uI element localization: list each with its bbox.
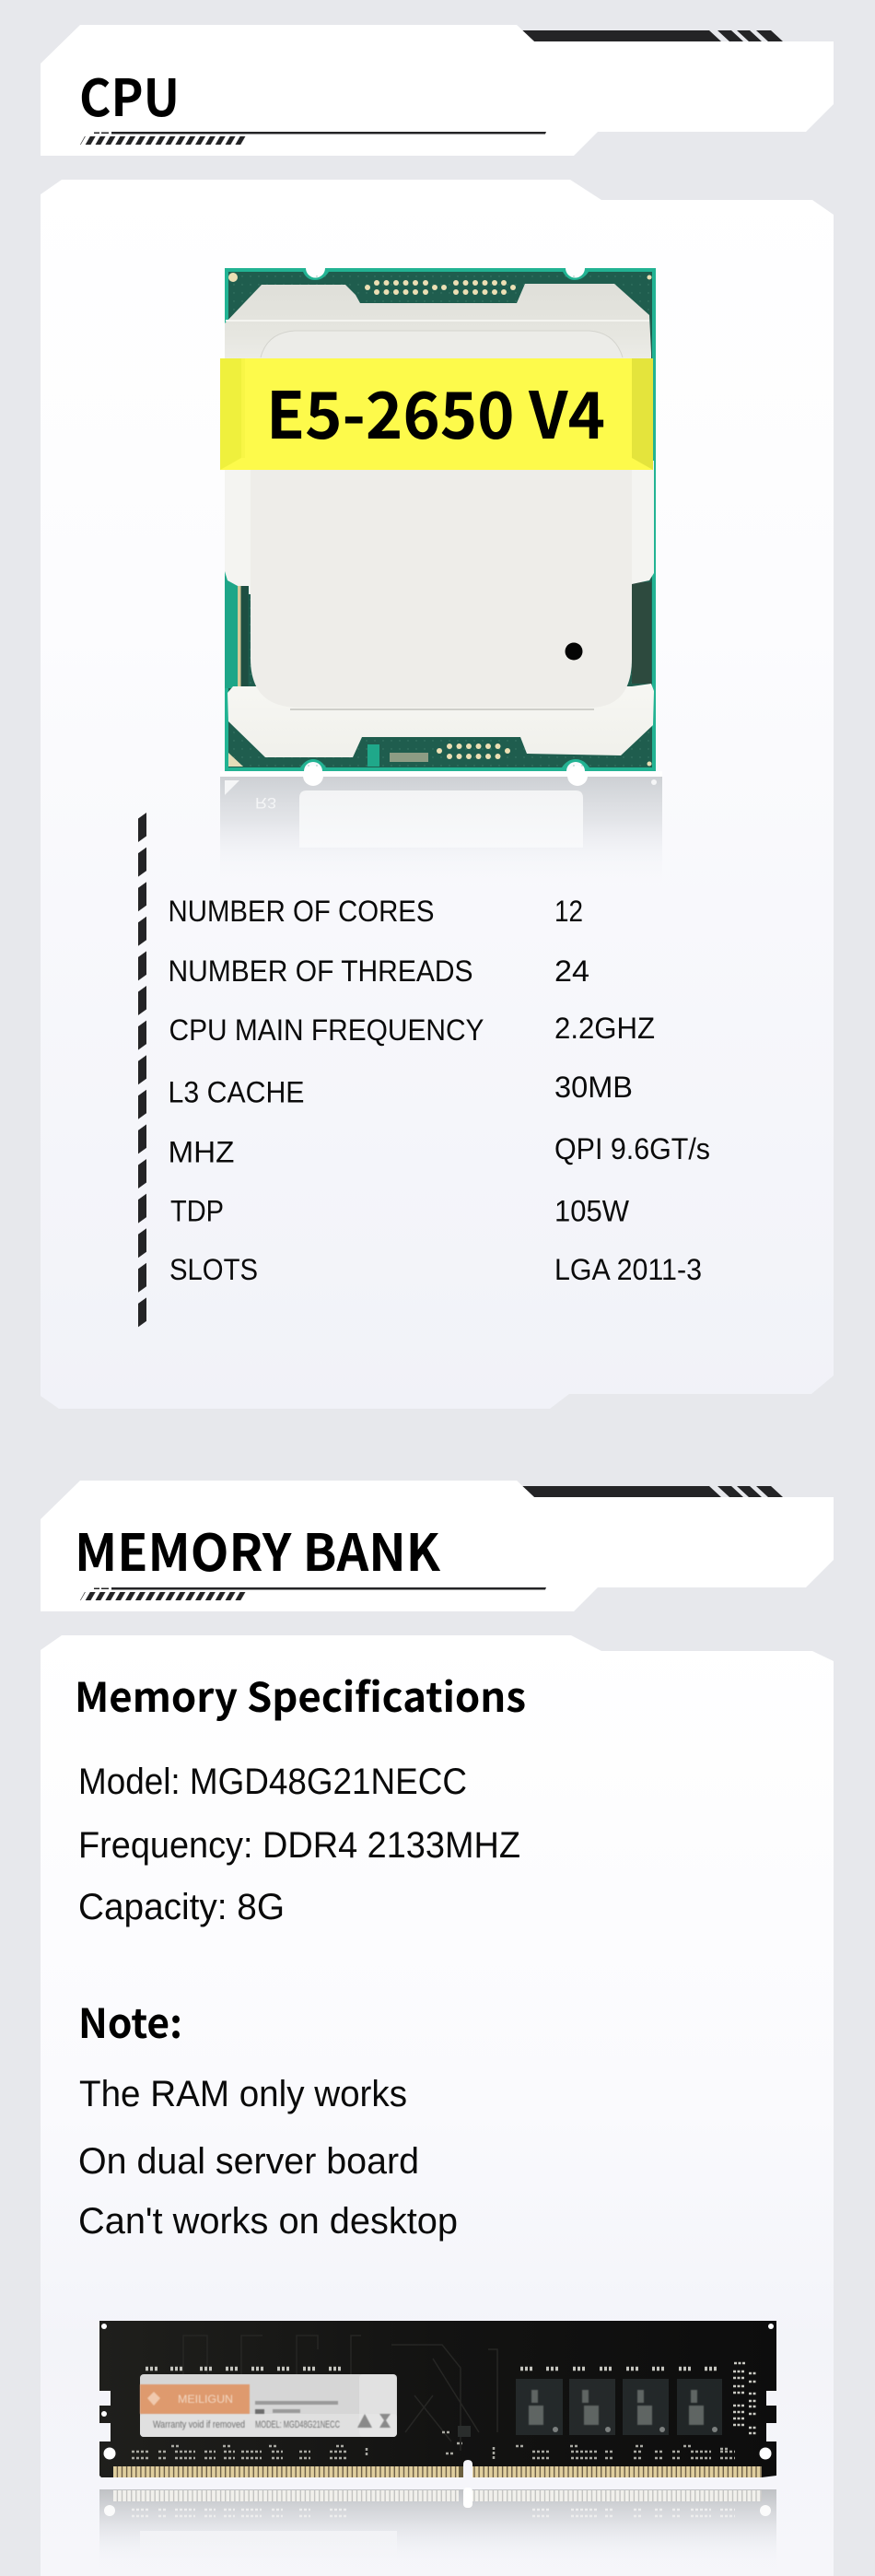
hatched strip xyxy=(80,136,250,145)
product label xyxy=(140,2374,397,2437)
hatched strip xyxy=(80,1592,250,1600)
striped vertical rule xyxy=(138,813,146,1327)
model number: E5-2650 V4 xyxy=(266,365,605,458)
blurred label text xyxy=(153,2401,391,2430)
panel: CPU specifications xyxy=(41,180,834,1409)
panel background xyxy=(41,180,834,1409)
heading: MEMORY BANK: MEMORY BANK xyxy=(75,1512,440,1586)
note lines: The RAM only works xyxy=(79,2074,407,2114)
header plate xyxy=(41,1481,834,1611)
CPU substrate xyxy=(225,268,656,771)
memory spec lines: Frequency: DDR4 2133MHZ xyxy=(78,1825,520,1866)
note lines xyxy=(78,2074,458,2242)
memory chips xyxy=(516,2379,722,2435)
spec labels: CPU MAIN FREQUENCY xyxy=(169,1013,484,1047)
heading underline xyxy=(94,132,546,135)
left side strip xyxy=(225,576,238,688)
spec labels: NUMBER OF THREADS xyxy=(168,954,473,988)
upper heat-spreader frame xyxy=(225,284,651,369)
memory spec lines xyxy=(78,1762,520,1927)
gold edge connector xyxy=(113,2466,459,2477)
gold contact dots xyxy=(228,273,652,767)
top SMD row xyxy=(146,2367,717,2371)
note lines: On dual server board xyxy=(78,2141,419,2182)
spec labels xyxy=(168,895,484,1286)
side rails xyxy=(225,461,259,594)
memory spec lines: Capacity: 8G xyxy=(78,1887,285,1927)
blurred label text: MODEL: MGD48G21NECC xyxy=(255,2419,340,2430)
heading underline xyxy=(94,1587,546,1590)
sub-heading: Memory Specifications: Memory Specifications xyxy=(75,1665,526,1724)
panel background xyxy=(41,1635,834,2576)
lower SMD rows xyxy=(132,2432,735,2460)
spec values: 24 xyxy=(554,954,589,988)
header plate xyxy=(41,25,834,156)
product label: MEILIGUN xyxy=(178,2393,233,2406)
CPU reflection xyxy=(220,766,662,887)
right side strip xyxy=(632,582,651,684)
header: MEMORY BANK xyxy=(41,1481,834,1611)
yellow model band xyxy=(220,358,653,470)
spec labels: SLOTS xyxy=(169,1253,258,1286)
pin one triangle xyxy=(228,753,243,767)
panel: memory specifications xyxy=(41,1635,834,2576)
RAM module photo xyxy=(99,2321,776,2576)
spec labels: L3 CACHE xyxy=(168,1076,304,1109)
mirrored R3 mark: R3 xyxy=(255,794,276,812)
central chip xyxy=(458,2426,471,2437)
spec values xyxy=(554,895,710,1286)
orange logo block xyxy=(140,2384,250,2414)
RAM circuit board xyxy=(99,2321,776,2477)
black hole mark xyxy=(566,643,582,660)
spec values: LGA 2011-3 xyxy=(554,1253,702,1286)
header accent bar xyxy=(522,1486,783,1497)
right SMD cluster xyxy=(733,2363,757,2433)
spec labels: MHZ xyxy=(168,1135,234,1168)
faint traces xyxy=(183,2336,497,2451)
spec values: 30MB xyxy=(554,1071,633,1104)
lower heat-spreader frame xyxy=(228,684,654,757)
spec values: 2.2GHZ xyxy=(554,1012,655,1045)
CPU photo xyxy=(225,268,656,771)
spec values: QPI 9.6GT/s xyxy=(554,1132,710,1165)
RAM reflection xyxy=(99,2488,776,2576)
heading: CPU: CPU xyxy=(79,57,180,131)
substrate marks xyxy=(368,744,379,767)
memory spec lines: Model: MGD48G21NECC xyxy=(78,1762,467,1802)
note heading: Note: xyxy=(78,1991,182,2050)
mounting holes xyxy=(101,2324,774,2460)
spec labels: TDP xyxy=(170,1194,224,1227)
note lines: Can't works on desktop xyxy=(78,2201,458,2242)
blurred barcode xyxy=(255,2386,369,2399)
spec labels: NUMBER OF CORES xyxy=(168,895,435,928)
spec values: 105W xyxy=(554,1194,629,1227)
header accent bar xyxy=(522,30,783,41)
header: CPU xyxy=(41,25,834,156)
spec values: 12 xyxy=(554,895,583,928)
central lid xyxy=(251,461,632,708)
blurred label text: Warranty void if removed xyxy=(153,2419,245,2430)
